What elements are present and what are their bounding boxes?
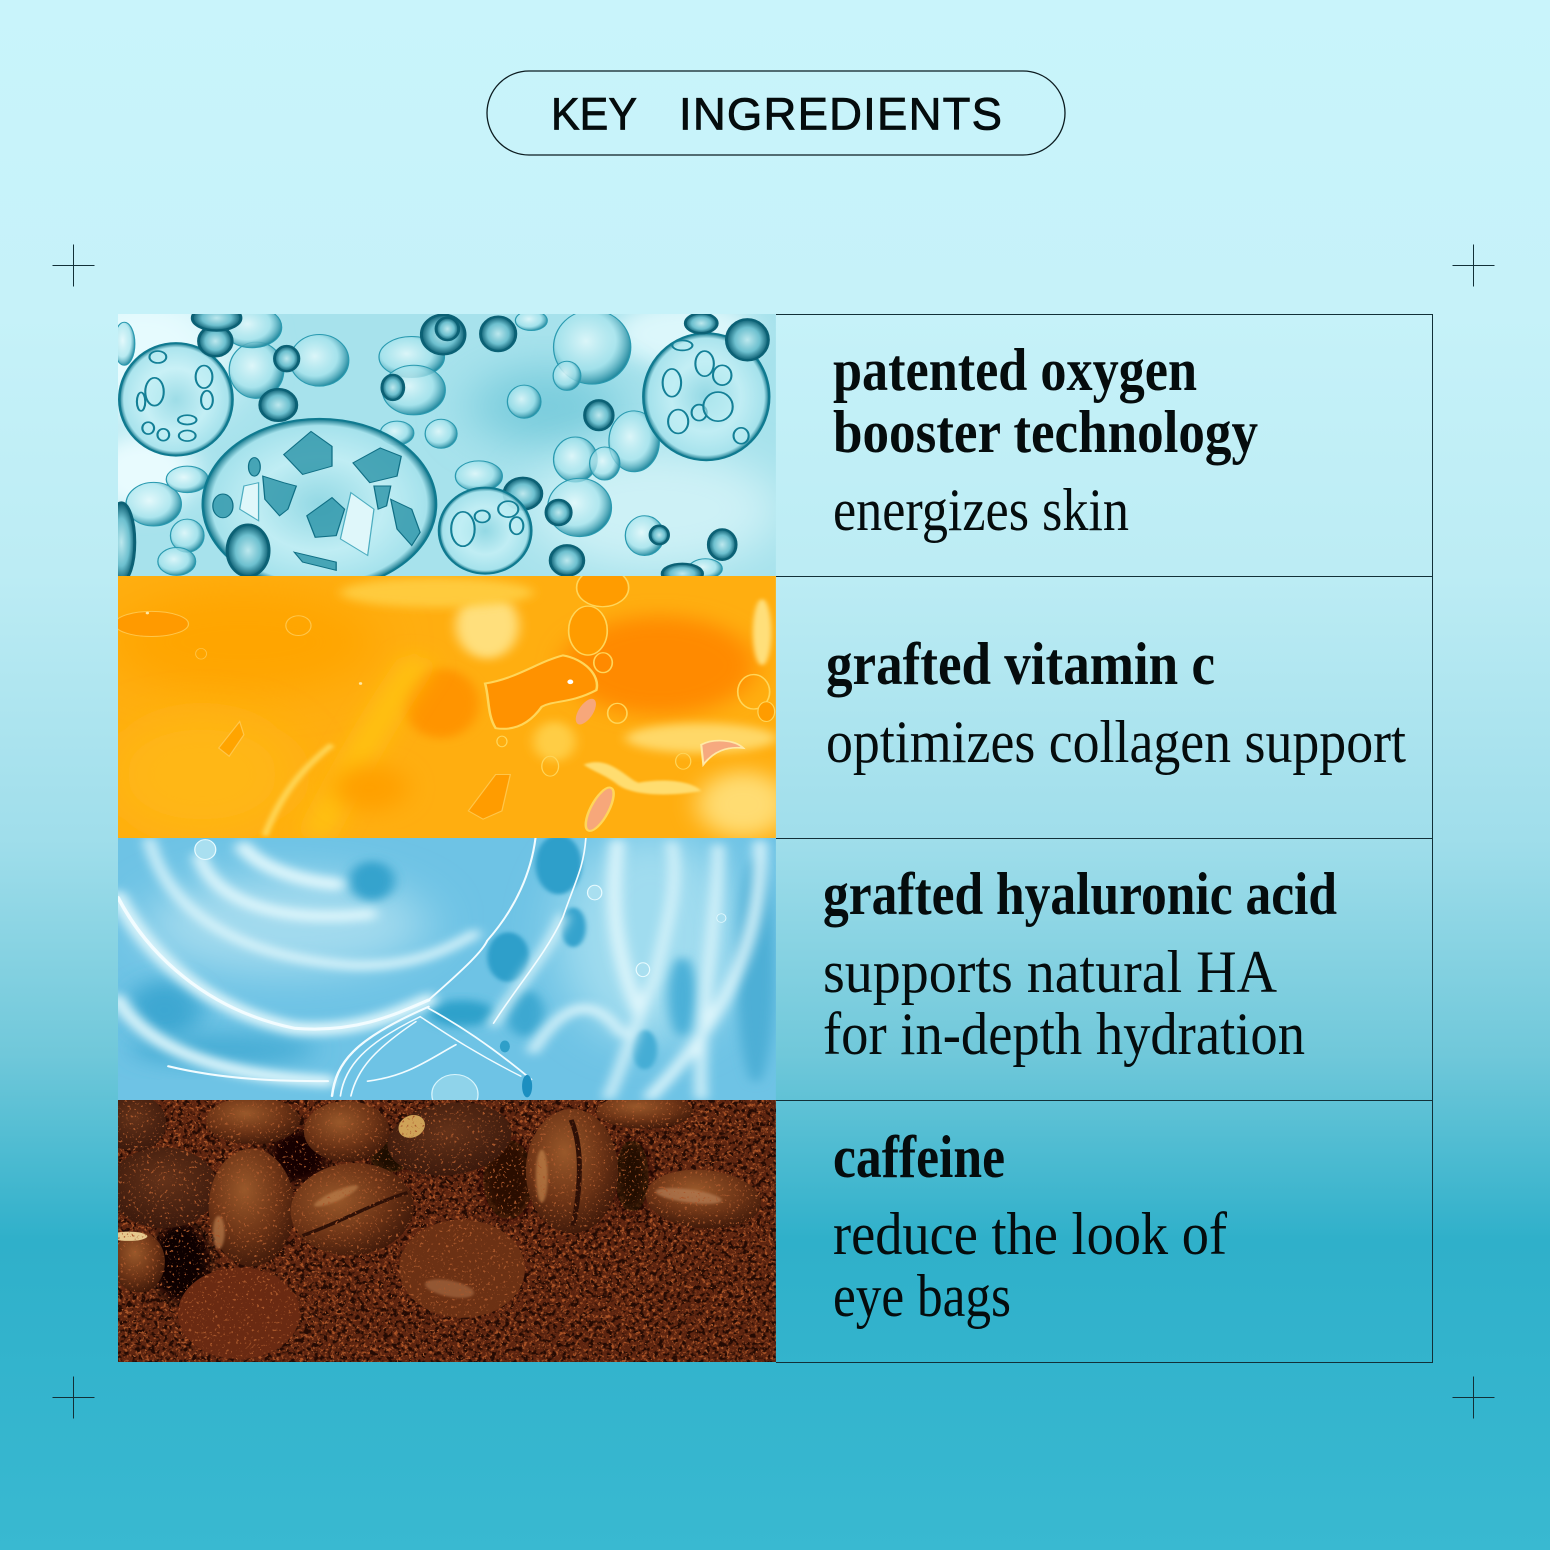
ingredient text: patented oxygen booster technology: patented oxygen xyxy=(833,337,1197,403)
photo: coffee beans xyxy=(103,1092,776,1362)
photo: water ripples hyaluronic acid xyxy=(118,831,776,1114)
central large bubble xyxy=(203,419,436,590)
icon: crosshair top right xyxy=(1452,244,1494,286)
soft background bubbles xyxy=(114,307,722,579)
coffee bean shapes xyxy=(103,1092,766,1359)
ingredient text: grafted hyaluronic acid: grafted hyaluronic acid xyxy=(823,861,1337,927)
title pill: key ingredients: INGREDIENTS xyxy=(679,88,1002,140)
ingredient text: grafted vitamin c: optimizes collagen support xyxy=(826,709,1406,775)
bubbles and membranes xyxy=(115,568,775,833)
ingredient table grid xyxy=(776,314,1432,1362)
small defined bubbles xyxy=(108,305,768,584)
ingredient text: patented oxygen booster technology: booster technology xyxy=(833,399,1258,465)
left large bubble xyxy=(119,343,233,456)
ingredient text: grafted vitamin c: grafted vitamin c xyxy=(826,631,1215,697)
photo: orange vitamin c xyxy=(110,568,789,838)
ingredient text: grafted vitamin c xyxy=(826,631,1406,775)
photo: oxygen bubbles xyxy=(118,314,776,576)
soft ripple arcs xyxy=(118,841,760,1096)
ingredient text: caffeine: eye bags xyxy=(833,1263,1011,1329)
bright ripple lines xyxy=(118,838,726,1114)
title pill: key ingredients: KEY xyxy=(551,88,637,140)
ingredient text: grafted hyaluronic acid: for in-depth hydration xyxy=(823,1001,1305,1067)
ingredient text: grafted hyaluronic acid: supports natural HA xyxy=(823,939,1277,1005)
ingredient text: caffeine: caffeine xyxy=(833,1124,1005,1190)
icon: crosshair bottom left xyxy=(52,1376,94,1418)
ingredient text: patented oxygen booster technology xyxy=(833,337,1258,543)
icon: crosshair top left xyxy=(52,244,94,286)
ingredient text: grafted hyaluronic acid xyxy=(823,861,1337,1067)
icon: crosshair bottom right xyxy=(1452,1376,1494,1418)
ground coffee flecks xyxy=(118,1100,776,1362)
right large bubble xyxy=(643,333,769,460)
ingredient text: caffeine: reduce the look of xyxy=(833,1201,1227,1267)
title pill: key ingredients xyxy=(487,71,1065,155)
ingredient text: patented oxygen booster technology: energizes skin xyxy=(833,477,1129,543)
ingredient text: caffeine xyxy=(833,1124,1227,1329)
